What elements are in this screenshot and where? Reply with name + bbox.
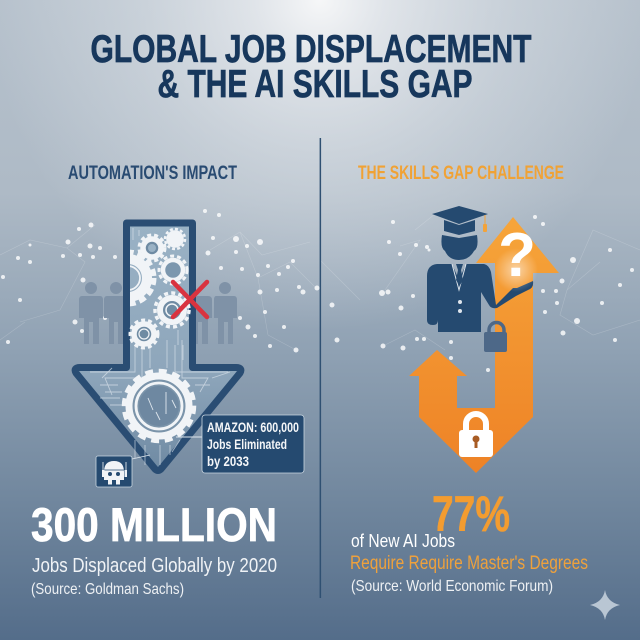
arrow: skills gap orange u-arrow <box>409 217 559 473</box>
title <box>90 28 532 106</box>
callout: amazon: AMAZON: 600,000 <box>207 419 299 435</box>
callout: amazon <box>176 415 304 473</box>
divider <box>320 138 321 598</box>
heading: automation's impact: AUTOMATION'S IMPACT <box>68 163 237 184</box>
icon: question mark: ? <box>498 221 536 290</box>
gears group <box>122 228 196 444</box>
circuit traces <box>90 228 230 465</box>
icon: graduate figure <box>427 206 533 332</box>
network particles <box>0 209 640 372</box>
stat: 77 percent: 77% <box>432 486 510 542</box>
icon: workers group <box>79 282 237 344</box>
caption: masters degrees: Require Require Master's Degrees <box>350 553 588 574</box>
arrow: automation down arrow <box>75 223 241 470</box>
source: goldman sachs: (Source: Goldman Sachs) <box>31 581 184 598</box>
stat: 300 million: 300 MILLION <box>31 498 277 551</box>
callout: amazon: Jobs Eliminated <box>207 436 287 452</box>
stat: 300 million <box>31 498 277 577</box>
callout: amazon: by 2033 <box>207 453 249 469</box>
caption: jobs displaced: Jobs Displaced Globally by 2020 <box>32 555 277 577</box>
icon: robot <box>96 455 150 487</box>
source: world economic forum: (Source: World Economic Forum) <box>351 578 553 595</box>
icon: white padlock <box>459 414 493 457</box>
caption: new ai jobs: of New AI Jobs <box>351 531 455 551</box>
heading: skills gap challenge: THE SKILLS GAP CHALLENGE <box>358 163 564 184</box>
icon: sparkle <box>590 590 620 620</box>
icon: red cross <box>173 282 207 317</box>
icon: small padlock <box>484 323 507 352</box>
title: & THE AI SKILLS GAP <box>158 63 472 106</box>
